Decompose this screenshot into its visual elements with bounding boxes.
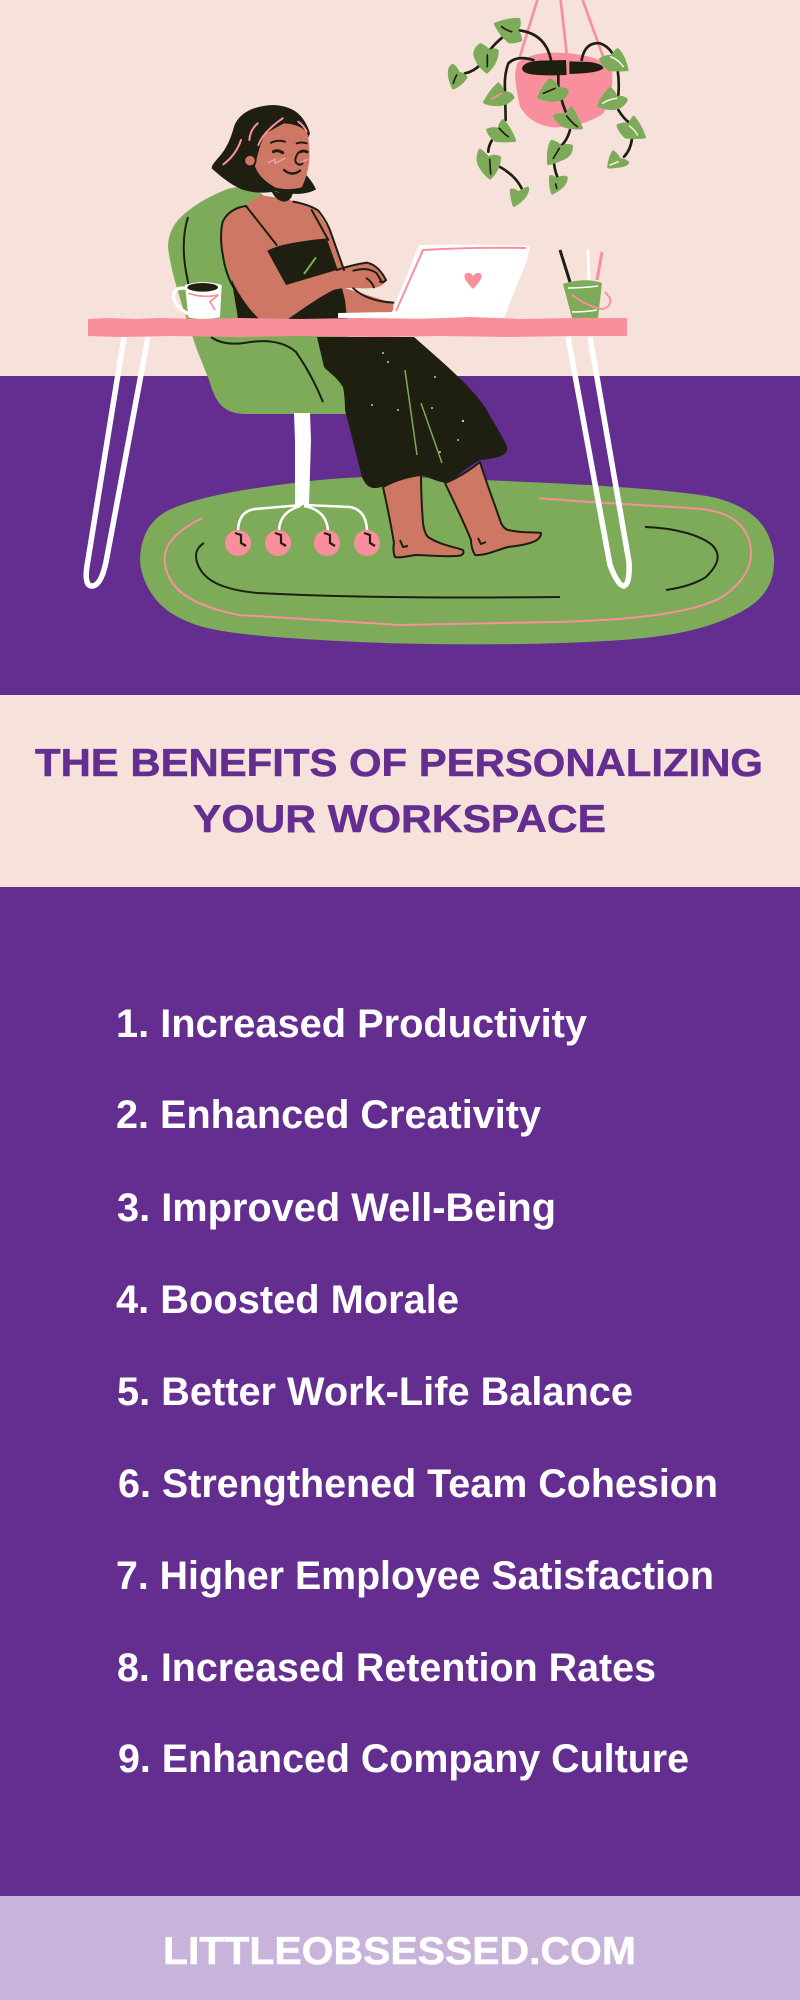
- footer website text: LITTLEOBSESSED.COM: [163, 1930, 636, 1973]
- pot ropes: [519, 0, 603, 60]
- panel: footer: [0, 1896, 800, 2000]
- desk leg: right hairpin: [568, 337, 629, 586]
- list item 7: 7. Higher Employee Satisfaction: [116, 1554, 714, 1598]
- hair: [212, 105, 316, 194]
- panel: hero illustration: [0, 0, 800, 644]
- desk top: [88, 317, 627, 337]
- pen cup: [560, 250, 610, 318]
- title: YOUR WORKSPACE: [193, 798, 606, 841]
- list item 5: 5. Better Work-Life Balance: [117, 1370, 633, 1414]
- office chair: [168, 187, 380, 556]
- rug: [140, 477, 774, 644]
- list item 4: 4. Boosted Morale: [116, 1278, 459, 1322]
- list item 6: 6. Strengthened Team Cohesion: [118, 1462, 718, 1506]
- person: black dress skirt: [317, 337, 507, 488]
- skin torso: [243, 195, 393, 316]
- outlines: [221, 202, 393, 303]
- person: legs and feet: [383, 462, 541, 557]
- stems: [465, 30, 632, 188]
- laptop: [338, 245, 530, 318]
- person: upper body and head: [212, 105, 393, 321]
- title: THE BENEFITS OF PERSONALIZING: [35, 742, 763, 785]
- list item 8: 8. Increased Retention Rates: [117, 1646, 656, 1690]
- face: [255, 123, 309, 189]
- leaves: [449, 19, 644, 205]
- neck shadow: [272, 192, 293, 202]
- front arm and hand: [222, 206, 386, 320]
- hanging plant: [449, 0, 644, 205]
- panel: benefits list: [0, 887, 800, 1896]
- list item 2: 2. Enhanced Creativity: [116, 1093, 542, 1137]
- coffee mug: [173, 282, 222, 319]
- desk leg: left hairpin: [86, 337, 148, 586]
- icon: heart: [464, 273, 482, 289]
- leaf veins: [453, 27, 637, 188]
- pot: [515, 53, 612, 127]
- list item 3: 3. Improved Well-Being: [117, 1186, 556, 1230]
- list item 1: 1. Increased Productivity: [116, 1002, 588, 1046]
- black top: [232, 238, 347, 321]
- title: [35, 742, 763, 841]
- panel: title band: [0, 695, 800, 887]
- list item 9: 9. Enhanced Company Culture: [118, 1737, 689, 1781]
- facial features: [271, 141, 307, 174]
- hair highlights: [223, 118, 307, 164]
